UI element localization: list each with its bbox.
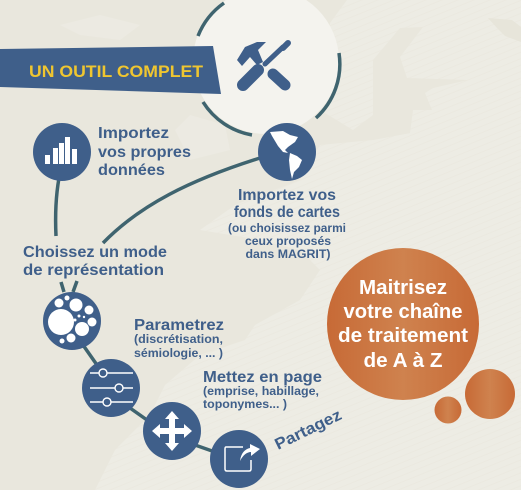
sea: top right patch [488, 18, 521, 42]
land: top left patch [60, 15, 140, 40]
icon: share [210, 430, 268, 488]
text: fonds de cartes: (ou choisissez parmi [228, 223, 346, 235]
text: partagez: Partagez [272, 407, 344, 454]
text: importez données: Importez [98, 125, 169, 142]
icon: hammer and screwdriver [237, 42, 288, 85]
orange circle with text [327, 248, 479, 400]
text: mode de représentation: de représentation [23, 262, 164, 279]
connector lines [56, 158, 260, 452]
orange bubble small [434, 396, 462, 424]
text: fonds de cartes: ceux proposés [245, 236, 331, 248]
text: fonds de cartes [228, 187, 346, 261]
land: peninsula [320, 0, 380, 130]
text: parametrez: sémiologie, ... ) [134, 348, 223, 360]
land: center patch [175, 115, 230, 160]
orange bubble large [465, 369, 515, 419]
orange circle with text: Maitrisez [359, 276, 447, 299]
orange circle with text: votre chaîne [344, 300, 462, 323]
text: importez données: données [98, 162, 165, 179]
sea: central basin [353, 27, 468, 140]
text: mettez en page: toponymes... ) [203, 399, 287, 411]
icon: proportional circles [43, 292, 101, 350]
text: fonds de cartes: fonds de cartes [234, 204, 340, 221]
text: parametrez [134, 317, 224, 360]
icon: bar chart circle [33, 123, 91, 181]
banner [0, 46, 221, 94]
text: parametrez: (discrétisation, [134, 334, 223, 346]
text: mettez en page: Mettez en page [203, 369, 322, 386]
icon: move arrows [143, 402, 201, 460]
text: importez données: vos propres [98, 144, 191, 161]
text: importez données [98, 125, 191, 179]
text: parametrez: Parametrez [134, 317, 224, 334]
text: fonds de cartes: Importez vos [238, 187, 336, 204]
tools circle [193, 0, 340, 135]
icon: sliders [82, 359, 140, 417]
icon: globe circle [258, 123, 316, 181]
text: mettez en page [203, 369, 322, 411]
orange circle with text: de A à Z [364, 349, 442, 372]
text: mode de représentation: Choissez un mode [23, 244, 167, 261]
text: fonds de cartes: dans MAGRIT) [246, 249, 331, 261]
orange circle with text: de traitement [338, 324, 468, 347]
text: mettez en page: (emprise, habillage, [203, 386, 319, 398]
banner title: UN OUTIL COMPLET [29, 62, 204, 81]
text: mode de représentation [23, 244, 167, 279]
